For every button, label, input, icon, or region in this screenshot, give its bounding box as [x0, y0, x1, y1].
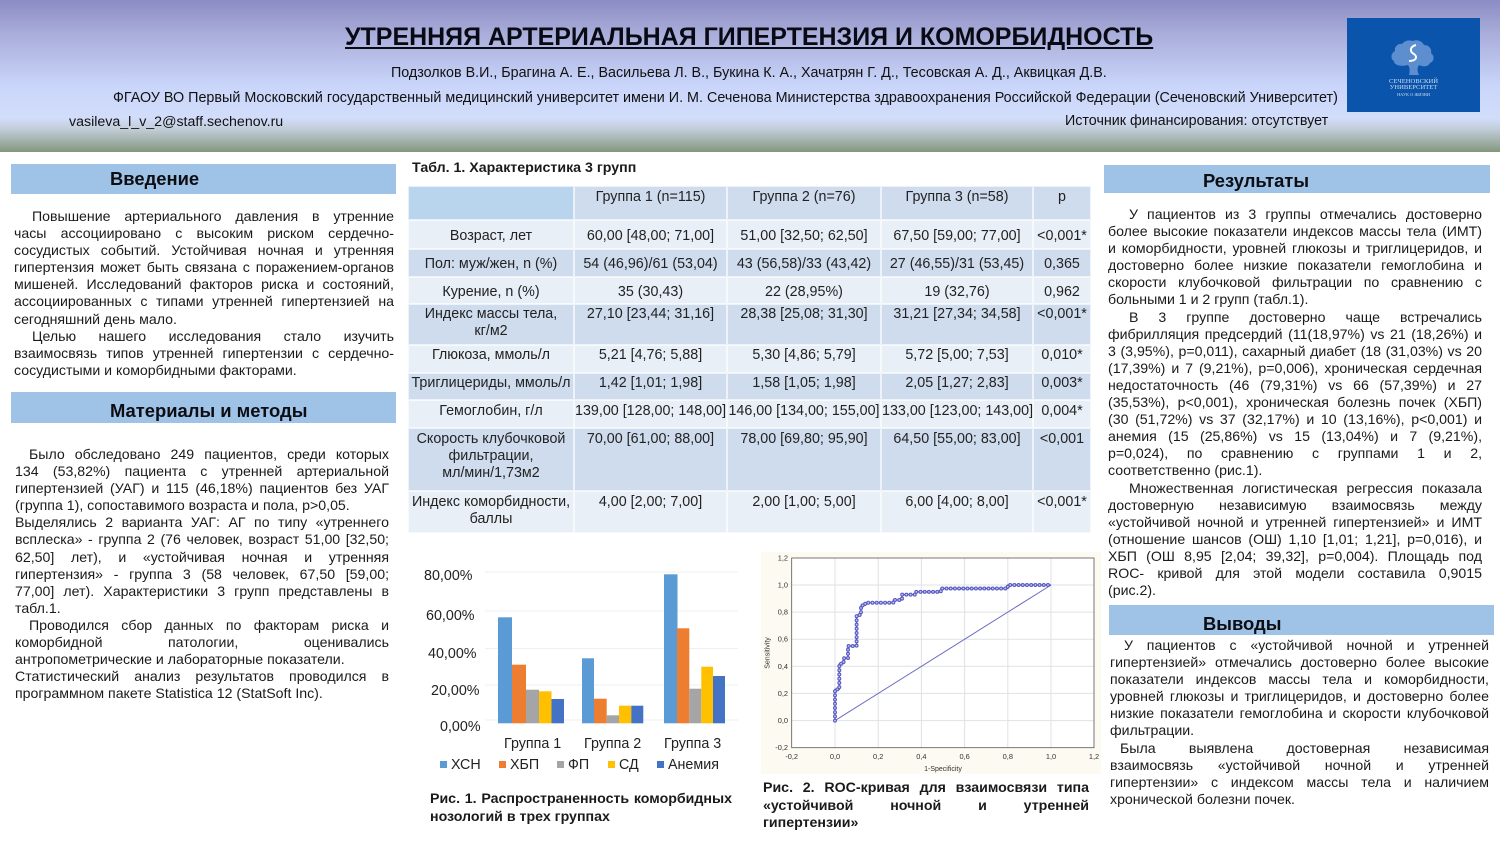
x axis ticks: 0,0	[830, 752, 840, 761]
text: results: (17,39%) и 7 (9,21%), p=0,006), хроническая сердечная	[1108, 360, 1482, 376]
text: introduction: часы ассоциировано с высоким риском сердечно-	[14, 225, 394, 241]
y axis labels: 60,00%	[426, 608, 475, 624]
table: characteristics of 3 groups: 2,00 [1,00; 5,00]	[752, 494, 856, 510]
y axis labels: 40,00%	[428, 646, 477, 662]
text: methods	[15, 446, 389, 701]
text: conclusions: фильтрации.	[1110, 722, 1194, 738]
table: characteristics of 3 groups: Индекс массы тела,	[425, 306, 557, 322]
text: methods: гипертензия» - группа 3 (58 человек, 67,50 [59,00;	[15, 566, 389, 582]
y axis ticks	[775, 554, 788, 752]
x axis ticks: 0,4	[916, 752, 927, 761]
table: characteristics of 3 groups: 28,38 [25,08; 31,30]	[740, 306, 868, 322]
text: introduction: Целью нашего исследования стало изучить	[32, 328, 394, 344]
text: introduction: взаимосвязь типов утренней гипертензии с сердечно-	[14, 345, 394, 361]
y axis ticks: 1,0	[778, 580, 788, 590]
x axis ticks: 1,0	[1046, 752, 1056, 761]
text: methods: всплеска» - группа 2 (76 человек, возраст 51,00 [32,50;	[15, 531, 389, 547]
table: characteristics of 3 groups: 0,010*	[1041, 347, 1083, 363]
table: characteristics of 3 groups: 35 (30,43)	[618, 284, 683, 300]
table: characteristics of 3 groups: 1,58 [1,05; 1,98]	[752, 375, 856, 391]
text: results: достоверную независимую взаимосвязь между	[1108, 497, 1482, 513]
text: results: ROC- кривой для этой модели составила 0,9015	[1108, 565, 1482, 581]
table: characteristics of 3 groups: 51,00 [32,50; 62,50]	[740, 228, 868, 244]
text: introduction: Повышение артериального давления в утренние	[32, 208, 394, 224]
table: characteristics of 3 groups	[408, 186, 1091, 532]
table: characteristics of 3 groups: Индекс коморбидности,	[412, 494, 570, 510]
x axis labels: Группа 3	[664, 736, 721, 752]
table: characteristics of 3 groups: 5,30 [4,86; 5,79]	[752, 347, 856, 363]
text: methods: 134 (53,82%) пациента с утренней артериальной	[15, 463, 389, 479]
table: characteristics of 3 groups: p	[1058, 189, 1066, 205]
text: introduction: мишеней. Исследований факторов риска и состояний,	[14, 276, 394, 292]
x axis labels: Группа 1	[504, 736, 561, 752]
logo text: СЕЧЕНОВСКИЙ	[1389, 78, 1438, 85]
group 1 bars	[498, 617, 564, 723]
bar chart: comorbidity prevalence	[424, 568, 738, 773]
table: characteristics of 3 groups: Глюкоза, ммоль/л	[432, 347, 550, 363]
diagonal reference line	[835, 585, 1051, 721]
logo: Sechenov University	[1347, 18, 1480, 112]
text: methods: коморбидной патологии, оценивались	[15, 634, 389, 650]
text: results: больными 1 и 2 групп (табл.1).	[1108, 291, 1308, 307]
text: methods: 77,00] лет). Характеристики 3 групп представлены в	[15, 583, 389, 599]
text: conclusions: гипертензией» отмечались достоверно более высокие	[1110, 654, 1489, 670]
text: results: У пациентов из 3 группы отмечались достоверно	[1129, 206, 1482, 222]
email: vasileva_l_v_2@staff.sechenov.ru	[69, 114, 283, 130]
table: characteristics of 3 groups: Группа 2 (n=76)	[753, 189, 855, 205]
authors: Подзолков В.И., Брагина А. Е., Васильева Л. В., Букина К. А., Хачатрян Г. Д., Тесовская А. Д., Аквицкая Д.В.	[391, 65, 1107, 81]
text: methods: Проводился сбор данных по факторам риска и	[29, 617, 389, 633]
x axis title: 1-Specificity	[924, 766, 962, 773]
table: characteristics of 3 groups: 78,00 [69,80; 95,90]	[740, 431, 868, 447]
header banner	[0, 0, 1500, 152]
funding: Источник финансирования: отсутствует	[1065, 113, 1328, 129]
table: characteristics of 3 groups: 0,962	[1044, 284, 1080, 300]
y axis labels	[424, 568, 481, 735]
x axis ticks: 1,2	[1089, 752, 1099, 761]
text: methods: табл.1.	[15, 600, 61, 616]
ROC chart	[761, 552, 1101, 774]
y axis ticks: 0,8	[778, 608, 788, 617]
table: characteristics of 3 groups: Гемоглобин, г/л	[439, 403, 543, 419]
table: characteristics of 3 groups: 146,00 [134,00; 155,00]	[728, 403, 880, 419]
logo text: УНИВЕРСИТЕТ	[1390, 84, 1437, 91]
table: characteristics of 3 groups: кг/м2	[474, 323, 508, 339]
heading: Введение: Введение	[110, 168, 199, 189]
text: results: более высокие показатели индексов массы тела (ИМТ)	[1108, 223, 1482, 239]
text: results: фибрилляция предсердий (11(18,97%) vs 21 (18,26%) и	[1108, 326, 1482, 342]
table: characteristics of 3 groups: 0,003*	[1041, 375, 1083, 391]
text: conclusions: У пациентов с «устойчивой ночной и утренней	[1124, 637, 1489, 653]
text: results: соответственно (рис.1).	[1108, 462, 1262, 478]
group 3 bars	[664, 574, 725, 723]
table: characteristics of 3 groups: Группа 3 (n=58)	[906, 189, 1008, 205]
logo text: НАУК О ЖИЗНИ	[1397, 92, 1430, 97]
x axis ticks: 0,8	[1003, 752, 1013, 761]
table: characteristics of 3 groups: 2,05 [1,27; 2,83]	[905, 375, 1009, 391]
x axis labels: Группа 2	[584, 736, 641, 752]
heading: Материалы и методы: Материалы и методы	[110, 400, 307, 421]
text: results: анемия (15 (25,86%) vs 15 (13,04%) и 7 (9,21%),	[1108, 428, 1482, 444]
heading: Результаты	[1104, 165, 1490, 193]
table: characteristics of 3 groups: Скорость клубочковой	[417, 431, 565, 447]
table: characteristics of 3 groups: 54 (46,96)/61 (53,04)	[583, 256, 718, 272]
text: introduction	[14, 208, 394, 378]
table: characteristics of 3 groups: баллы	[470, 511, 512, 527]
table: characteristics of 3 groups: <0,001*	[1037, 494, 1087, 510]
table: characteristics of 3 groups: Курение, n (%)	[442, 284, 540, 300]
text: results: p=0,024), по сравнению с группами 1 и 2,	[1108, 445, 1482, 461]
text: conclusions: хронической болезни почек.	[1110, 791, 1295, 807]
text: results: (30 (51,72%) vs 37 (32,17%) и 10 (13,16%), p<0,001) и	[1108, 411, 1482, 427]
text: methods: гипертензией (УАГ) и 115 (46,18%) пациентов без УАГ	[15, 480, 389, 496]
y axis labels: 20,00%	[431, 683, 480, 699]
table: characteristics of 3 groups: 4,00 [2,00; 7,00]	[599, 494, 702, 510]
heading: Материалы и методы	[11, 392, 396, 423]
text: methods: Статистический анализ результатов проводился в	[15, 668, 389, 684]
text: results: и коморбидности, уровней глюкозы и триглицеридов, и	[1108, 240, 1482, 256]
text: conclusions: взаимосвязь «устойчивой ночной и утренней	[1110, 757, 1489, 773]
table: characteristics of 3 groups: 27,10 [23,44; 31,16]	[587, 306, 714, 322]
x axis ticks: 0,6	[959, 752, 970, 761]
table: characteristics of 3 groups: 0,004*	[1041, 403, 1083, 419]
table: characteristics of 3 groups: 19 (32,76)	[924, 284, 990, 300]
ROC curve	[835, 585, 1051, 721]
table: characteristics of 3 groups: 139,00 [128,00; 148,00]	[575, 403, 726, 419]
y axis ticks: 0,2	[778, 689, 788, 698]
table: characteristics of 3 groups: 5,72 [5,00; 7,53]	[905, 347, 1009, 363]
text: results: (отношение шансов (ОШ) 1,10 [1,01; 1,21], p=0,016), и	[1108, 531, 1482, 547]
y axis ticks: 0,0	[778, 716, 788, 725]
table: characteristics of 3 groups: 60,00 [48,00; 71,00]	[587, 228, 714, 244]
y axis labels: 0,00%	[440, 719, 481, 735]
text: results: «устойчивой ночной и утренней гипертензией» и ИМТ	[1108, 514, 1482, 530]
legend: ХБП	[510, 757, 539, 773]
x axis ticks	[785, 752, 1099, 761]
table: characteristics of 3 groups: Триглицериды, ммоль/л	[412, 375, 570, 391]
text: results: достоверно более низкие показатели гемоглобина и	[1108, 257, 1482, 273]
text: introduction: ассоциированных с типами утренней гипертензией на	[14, 293, 394, 309]
text: methods: программном пакете Statistica 12 (StatSoft Inc).	[15, 685, 323, 701]
x axis ticks: 0,2	[873, 752, 883, 761]
legend: ХСН	[451, 757, 481, 773]
text: methods: Выделялись 2 варианта УАГ: АГ по типу «утреннего	[15, 514, 389, 530]
logo text	[1389, 78, 1438, 97]
table: characteristics of 3 groups: <0,001*	[1037, 228, 1087, 244]
table: characteristics of 3 groups: 64,50 [55,00; 83,00]	[893, 431, 1021, 447]
table: characteristics of 3 groups: 133,00 [123,00; 143,00]	[882, 403, 1033, 419]
text: methods: антропометрические и лабораторные показатели.	[15, 651, 345, 667]
x axis ticks: -0,2	[785, 752, 798, 761]
caption: figure 2: гипертензии»	[763, 815, 858, 831]
text: results: 3 (3,95%), p=0,011), сахарный диабет (18 (31,03%) vs 20	[1108, 343, 1482, 359]
table: characteristics of 3 groups: <0,001*	[1037, 306, 1087, 322]
heading: Выводы	[1109, 605, 1494, 635]
y axis labels: 80,00%	[424, 568, 473, 584]
legend: ФП	[568, 757, 589, 773]
table: characteristics of 3 groups: фильтрации,	[448, 448, 534, 464]
text: results: ХБП (ОШ 8,95 [2,04; 39,32], p=0,004). Площадь под	[1108, 548, 1482, 564]
table: characteristics of 3 groups: 67,50 [59,00; 77,00]	[893, 228, 1021, 244]
text: methods: Было обследовано 249 пациентов, среди которых	[29, 446, 389, 462]
text: conclusions	[1110, 637, 1489, 807]
caption: figure 1: Рис. 1. Распространенность коморбидных	[430, 791, 732, 807]
title: УТРЕННЯЯ АРТЕРИАЛЬНАЯ ГИПЕРТЕНЗИЯ И КОМОРБИДНОСТЬ	[345, 23, 1153, 51]
group 2 bars	[582, 658, 643, 723]
heading: Результаты: Результаты	[1203, 170, 1309, 191]
text: results: скорости клубочковой фильтрации по сравнению с	[1108, 274, 1482, 290]
x axis labels	[504, 736, 721, 752]
text: introduction: сосудистых событий. Устойчивая ночная и утренняя	[14, 242, 394, 258]
text: conclusions: показатели индексов массы тела и коморбидности,	[1110, 671, 1489, 687]
y axis ticks: -0,2	[775, 743, 788, 752]
text: conclusions: низкие показатели гемоглобина и скорости клубочковой	[1110, 705, 1489, 721]
caption: figure 2: Рис. 2. ROC-кривая для взаимосвязи типа	[763, 780, 1089, 796]
icon: tree	[1391, 40, 1434, 75]
caption: figure 1	[430, 791, 732, 825]
table: characteristics of 3 groups: 22 (28,95%)	[765, 284, 843, 300]
y axis ticks: 0,4	[778, 662, 788, 671]
text: results: Множественная логистическая регрессия показала	[1129, 480, 1482, 496]
text: results	[1108, 206, 1482, 598]
heading: Введение	[11, 164, 396, 194]
table: characteristics of 3 groups: Возраст, лет	[450, 228, 532, 244]
caption: figure 2	[763, 780, 1090, 831]
y axis ticks: 0,6	[778, 635, 788, 644]
table: characteristics of 3 groups: <0,001	[1040, 431, 1084, 447]
table: characteristics of 3 groups: мл/мин/1,73м2	[442, 465, 540, 481]
text: conclusions: гипертензии» с индексом массы тела и наличием	[1110, 774, 1489, 790]
text: results: (35,53%), p<0,001), хроническая болезнь почек (ХБП)	[1108, 394, 1482, 410]
y axis title: Sensitivity	[764, 637, 772, 669]
table: characteristics of 3 groups: 43 (56,58)/33 (43,42)	[737, 256, 871, 272]
text: introduction: гипертензия может быть связана с поражением-органов	[14, 259, 394, 275]
legend: Анемия	[668, 757, 719, 773]
table: characteristics of 3 groups: 70,00 [61,00; 88,00]	[587, 431, 714, 447]
table: characteristics of 3 groups: Пол: муж/жен, n (%)	[425, 256, 557, 272]
text: methods: (группа 1), сопоставимого возраста и пола, p>0,05.	[15, 497, 350, 513]
caption: figure 2: «устойчивой ночной и утренней	[763, 798, 1089, 814]
text: introduction: сосудистыми и коморбидными факторами.	[14, 362, 297, 378]
text: results: недостаточность (46 (79,31%) vs 66 (57,39%) и 27	[1108, 377, 1482, 393]
table: characteristics of 3 groups: 31,21 [27,34; 34,58]	[893, 306, 1021, 322]
table caption: Табл. 1. Характеристика 3 групп	[412, 160, 636, 176]
text: methods: 62,50] лет), и «устойчивая ночная и утренняя	[15, 549, 389, 565]
legend	[440, 757, 719, 773]
caption: figure 1: нозологий в трех группах	[430, 809, 610, 825]
affiliation: ФГАОУ ВО Первый Московский государственный медицинский университет имени И. М. Сеченова Министерства здравоохранения Российской Федерации (Сеченовский Университет)	[113, 90, 1338, 106]
table: characteristics of 3 groups: 6,00 [4,00; 8,00]	[905, 494, 1009, 510]
text: conclusions: Была выявлена достоверная независимая	[1120, 740, 1489, 756]
table: characteristics of 3 groups: 27 (46,55)/31 (53,45)	[890, 256, 1024, 272]
text: results: В 3 группе достоверно чаще встречались	[1129, 309, 1482, 325]
heading: Выводы: Выводы	[1203, 613, 1281, 634]
table: characteristics of 3 groups: 1,42 [1,01; 1,98]	[599, 375, 702, 391]
text: results: (рис.2).	[1108, 582, 1156, 598]
text: conclusions: уровней глюкозы и триглицеридов, и достоверно более	[1110, 688, 1489, 704]
table: characteristics of 3 groups: Группа 1 (n=115)	[596, 189, 705, 205]
table: characteristics of 3 groups: 0,365	[1044, 256, 1080, 272]
table: characteristics of 3 groups: 5,21 [4,76; 5,88]	[599, 347, 702, 363]
legend: СД	[619, 757, 639, 773]
text: introduction: сегодняшний день мало.	[14, 311, 177, 327]
y axis ticks: 1,2	[778, 554, 788, 562]
